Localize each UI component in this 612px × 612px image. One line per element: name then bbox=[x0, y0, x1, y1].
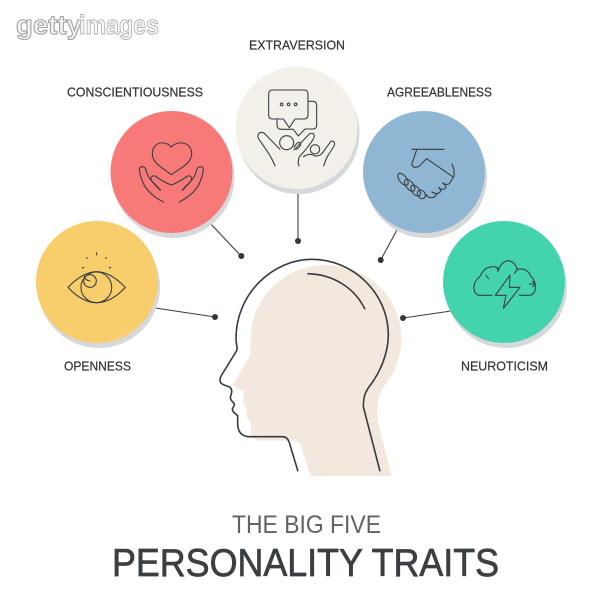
label: neuroticism: NEUROTICISM bbox=[461, 360, 548, 374]
panel: extraversion bbox=[236, 67, 360, 194]
icon: handshake bbox=[396, 149, 454, 200]
watermark bbox=[16, 10, 159, 40]
brain arc bbox=[307, 274, 365, 309]
title: PERSONALITY TRAITS bbox=[112, 542, 499, 585]
connector: agreeableness bbox=[378, 228, 398, 263]
connector: neuroticism bbox=[400, 311, 451, 321]
panel: agreeableness bbox=[363, 111, 487, 238]
watermark: getty bbox=[16, 10, 82, 40]
icon: heart in hands bbox=[139, 143, 203, 202]
label: openness: OPENNESS bbox=[64, 360, 131, 374]
watermark: images bbox=[79, 10, 159, 40]
connector: openness bbox=[152, 308, 218, 320]
icon: people talking bbox=[258, 90, 335, 166]
panel: neuroticism bbox=[443, 221, 567, 348]
label: extraversion: EXTRAVERSION bbox=[249, 38, 345, 52]
panel: conscientiousness bbox=[110, 111, 234, 238]
icon: storm cloud bbox=[474, 261, 535, 308]
icon: eye bbox=[68, 253, 125, 303]
head illustration bbox=[220, 259, 401, 476]
label: conscientiousness: CONSCIENTIOUSNESS bbox=[67, 86, 203, 100]
panel: openness bbox=[36, 221, 160, 348]
connector: conscientiousness bbox=[208, 221, 244, 259]
head fill bbox=[233, 265, 401, 476]
title: THE BIG FIVE bbox=[232, 511, 381, 539]
connector: extraversion bbox=[295, 189, 301, 244]
head outline bbox=[220, 259, 388, 471]
label: agreeableness: AGREEABLENESS bbox=[387, 86, 492, 100]
title bbox=[112, 511, 499, 585]
